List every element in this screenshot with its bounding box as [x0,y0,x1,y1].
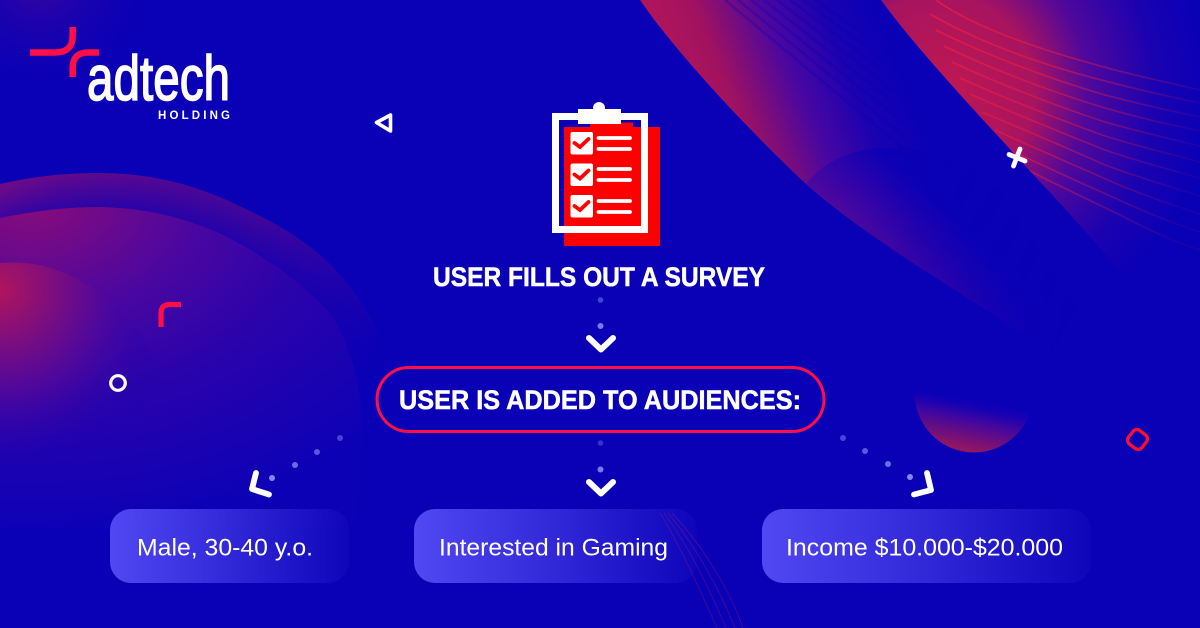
card: income: Income $10.000-$20.000 [786,534,1063,562]
icon: cross [1009,149,1025,166]
background shape: small half circle [914,393,1034,453]
logo wordmark: adtech [87,44,230,114]
logo [30,27,230,122]
logo mark [30,27,99,77]
card: interest [414,509,697,583]
background shape: lower-left middle dome [0,207,362,527]
background shape: dome [806,148,1002,321]
icon: red corner [161,304,181,327]
arrow: survey to audiences [589,297,613,350]
heading: survey step: USER FILLS OUT A SURVEY [433,262,765,292]
checklist row 3 [570,195,630,218]
arrow: right branch [840,435,931,494]
arrow: left branch [252,435,343,494]
icon: triangle [376,115,390,131]
card: demographic [110,509,349,583]
checklist row 1 [570,132,630,154]
logo subtitle: HOLDING [158,110,230,122]
icon: clipboard [556,102,660,246]
background shape: upper band [640,0,930,274]
checklist row 2 [570,164,630,186]
card: income [762,509,1091,583]
background shape: faint lines at bottom [660,513,743,628]
audiences pill [377,368,824,432]
background shape: lower-left inner dome [0,263,165,500]
audiences label: USER IS ADDED TO AUDIENCES: [399,385,801,415]
background shape: right band with lines [881,0,1200,285]
card: interest: Interested in Gaming [439,534,668,562]
icon: white ring [111,376,125,390]
arrow: centre branch [589,440,613,494]
icon: red rounded diamond [1126,428,1149,451]
card: demographic: Male, 30-40 y.o. [137,534,313,562]
background shape: lower-left outer dome [0,173,371,328]
